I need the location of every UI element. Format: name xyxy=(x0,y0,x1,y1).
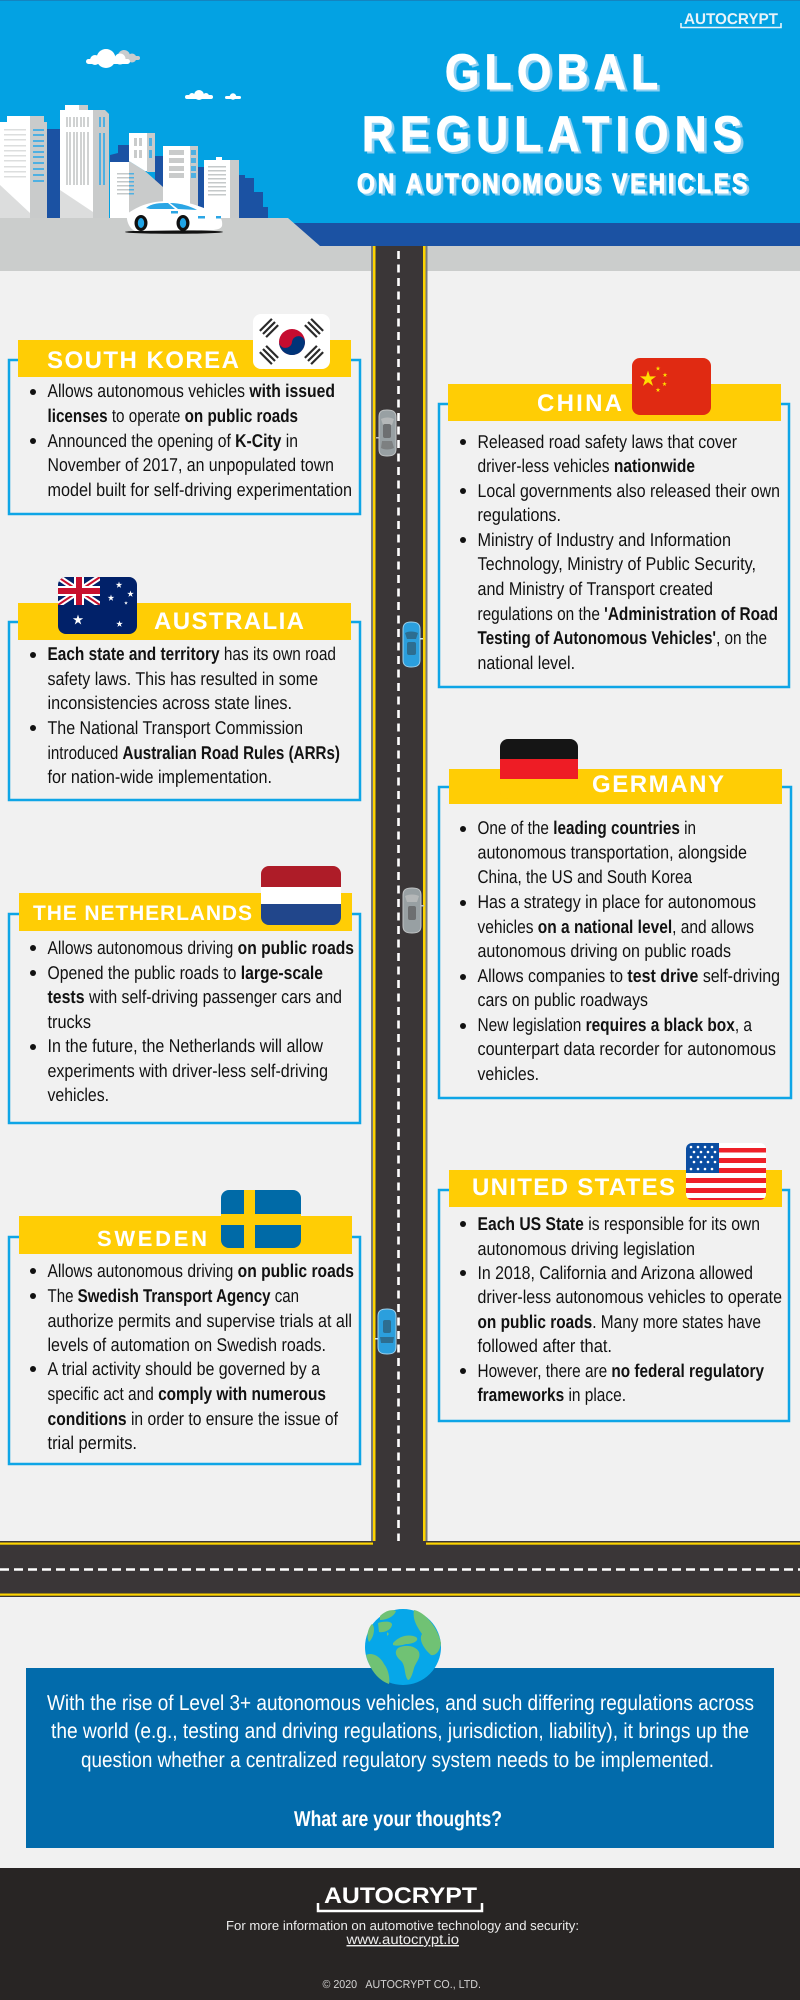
callout: closing question: question whether a centralized regulatory system needs to be implemented. xyxy=(81,1748,714,1772)
panel: sweden xyxy=(9,1190,360,1464)
text: united states bullets: followed after that. xyxy=(478,1335,612,1356)
text: germany bullets: China, the US and South Korea xyxy=(478,866,693,887)
text: netherlands bullets: trucks xyxy=(48,1011,91,1032)
text: sweden bullets: Allows autonomous driving on public roads xyxy=(48,1260,354,1281)
brand logo: top right: AUTOCRYPT xyxy=(684,11,779,28)
car: blue top xyxy=(403,622,423,667)
heading: germany: GERMANY xyxy=(592,771,724,798)
text: south korea bullets: Allows autonomous vehicles with issued xyxy=(48,380,335,401)
heading: sweden: SWEDEN xyxy=(97,1226,207,1251)
callout: closing question: What are your thoughts? xyxy=(294,1807,502,1831)
text: south korea bullets: model built for self-driving experimentation xyxy=(48,479,352,500)
flag: netherlands xyxy=(261,866,341,925)
text: germany bullets: Has a strategy in place for autonomous xyxy=(478,891,756,912)
text: germany bullets: Allows companies to test drive self-driving xyxy=(478,965,780,986)
panel: australia xyxy=(9,577,360,800)
heading: south korea: SOUTH KOREA xyxy=(47,347,239,374)
text: china bullets: Technology, Ministry of Public Security, xyxy=(478,553,756,574)
text: netherlands bullets: tests with self-driving passenger cars and xyxy=(48,986,342,1007)
panel: united states xyxy=(439,1143,789,1421)
text: china bullets: Ministry of Industry and Information xyxy=(478,529,731,550)
car: gray top xyxy=(376,410,396,456)
text: united states bullets: autonomous driving legislation xyxy=(478,1238,695,1259)
text: germany bullets xyxy=(460,817,780,1084)
text: sweden bullets: The Swedish Transport Agency can xyxy=(48,1285,299,1306)
text: china bullets: Testing of Autonomous Vehicles', on the xyxy=(478,627,767,648)
text: netherlands bullets: experiments with driver-less self-driving xyxy=(48,1060,328,1081)
text: china bullets: Released road safety laws that cover xyxy=(478,431,737,452)
vertical road xyxy=(371,246,428,1546)
panel: germany xyxy=(439,739,791,1098)
text: united states bullets: Each US State is responsible for its own xyxy=(478,1213,760,1234)
text: united states bullets xyxy=(460,1213,782,1405)
text: united states bullets: frameworks in place. xyxy=(478,1384,626,1405)
horizontal road xyxy=(0,1541,800,1597)
heading: australia: AUSTRALIA xyxy=(154,608,304,635)
white car xyxy=(125,201,223,234)
header banner xyxy=(0,0,800,271)
city skyline xyxy=(0,105,268,218)
title: REGULATIONS xyxy=(362,106,742,162)
flag: germany xyxy=(500,739,578,779)
text: germany bullets: vehicles on a national level, and allows xyxy=(478,916,754,937)
text: united states bullets: However, there are no federal regulatory xyxy=(478,1360,765,1381)
text: sweden bullets: specific act and comply with numerous xyxy=(48,1383,326,1404)
text: south korea bullets: Announced the opening of K-City in xyxy=(48,430,298,451)
text: germany bullets: autonomous transportation, alongside xyxy=(478,842,747,862)
car: blue lower xyxy=(375,1309,396,1354)
flag: australia xyxy=(58,577,137,634)
title: GLOBAL xyxy=(445,44,658,100)
text: united states bullets: on public roads. Many more states have xyxy=(478,1311,761,1332)
clouds xyxy=(86,49,241,100)
text: australia bullets: for nation-wide implementation. xyxy=(48,766,272,787)
text: sweden bullets: authorize permits and supervise trials at all xyxy=(48,1310,352,1331)
text: sweden bullets: levels of automation on Swedish roads. xyxy=(48,1334,326,1355)
text: netherlands bullets: vehicles. xyxy=(48,1084,109,1105)
heading: united states: UNITED STATES xyxy=(472,1174,675,1201)
text: china bullets: and Ministry of Transport created xyxy=(478,578,713,599)
text: netherlands bullets: In the future, the Netherlands will allow xyxy=(48,1035,324,1056)
title: ON AUTONOMOUS VEHICLES xyxy=(357,168,747,199)
text: sweden bullets: trial permits. xyxy=(48,1432,137,1453)
text: china bullets xyxy=(460,431,780,673)
text: netherlands bullets xyxy=(30,937,354,1105)
text: germany bullets: New legislation requires a black box, a xyxy=(478,1014,753,1035)
flag: united states xyxy=(686,1143,766,1201)
panel: south korea xyxy=(9,314,360,514)
icon: globe xyxy=(365,1609,441,1685)
text: china bullets: national level. xyxy=(478,652,575,673)
text: sweden bullets xyxy=(30,1260,354,1453)
text: australia bullets xyxy=(30,643,340,787)
text: sweden bullets: A trial activity should be governed by a xyxy=(48,1358,321,1379)
text: australia bullets: The National Transport Commission xyxy=(48,717,303,738)
title xyxy=(357,44,747,199)
text: germany bullets: One of the leading countries in xyxy=(478,817,696,838)
text: australia bullets: inconsistencies across state lines. xyxy=(48,692,292,713)
footer link: www.autocrypt.io xyxy=(345,1931,459,1947)
text: australia bullets: introduced Australian Road Rules (ARRs) xyxy=(48,742,340,763)
flag: china xyxy=(632,358,711,415)
text: south korea bullets xyxy=(30,380,352,500)
text: australia bullets: Each state and territory has its own road xyxy=(48,643,336,664)
text: australia bullets: safety laws. This has resulted in some xyxy=(48,668,318,689)
text: germany bullets: vehicles. xyxy=(478,1063,539,1084)
text: china bullets: driver-less vehicles nationwide xyxy=(478,455,695,476)
text: germany bullets: cars on public roadways xyxy=(478,989,648,1010)
heading: the netherlands: THE NETHERLANDS xyxy=(33,902,252,925)
panel: the netherlands xyxy=(9,866,360,1123)
text: netherlands bullets: Opened the public roads to large-scale xyxy=(48,962,323,983)
copyright: © 2020 AUTOCRYPT CO., LTD. xyxy=(322,1979,481,1991)
text: south korea bullets: licenses to operate on public roads xyxy=(48,405,298,426)
text: china bullets: regulations. xyxy=(478,504,561,525)
car: gray lower xyxy=(403,888,424,933)
text: sweden bullets: conditions in order to ensure the issue of xyxy=(48,1408,339,1429)
footer text: For more information on automotive technology and security: xyxy=(226,1918,579,1933)
text: united states bullets: In 2018, California and Arizona allowed xyxy=(478,1262,753,1283)
flag: sweden xyxy=(221,1190,301,1248)
text: south korea bullets: November of 2017, an unpopulated town xyxy=(48,454,334,475)
flag: south korea xyxy=(253,314,330,369)
heading: china: CHINA xyxy=(537,390,622,417)
panel: china xyxy=(439,358,789,687)
text: germany bullets: autonomous driving on public roads xyxy=(478,940,731,961)
brand logo: footer: AUTOCRYPT xyxy=(324,1883,477,1908)
text: netherlands bullets: Allows autonomous driving on public roads xyxy=(48,937,354,958)
footer xyxy=(0,1868,800,2000)
callout: closing question xyxy=(26,1668,774,1848)
